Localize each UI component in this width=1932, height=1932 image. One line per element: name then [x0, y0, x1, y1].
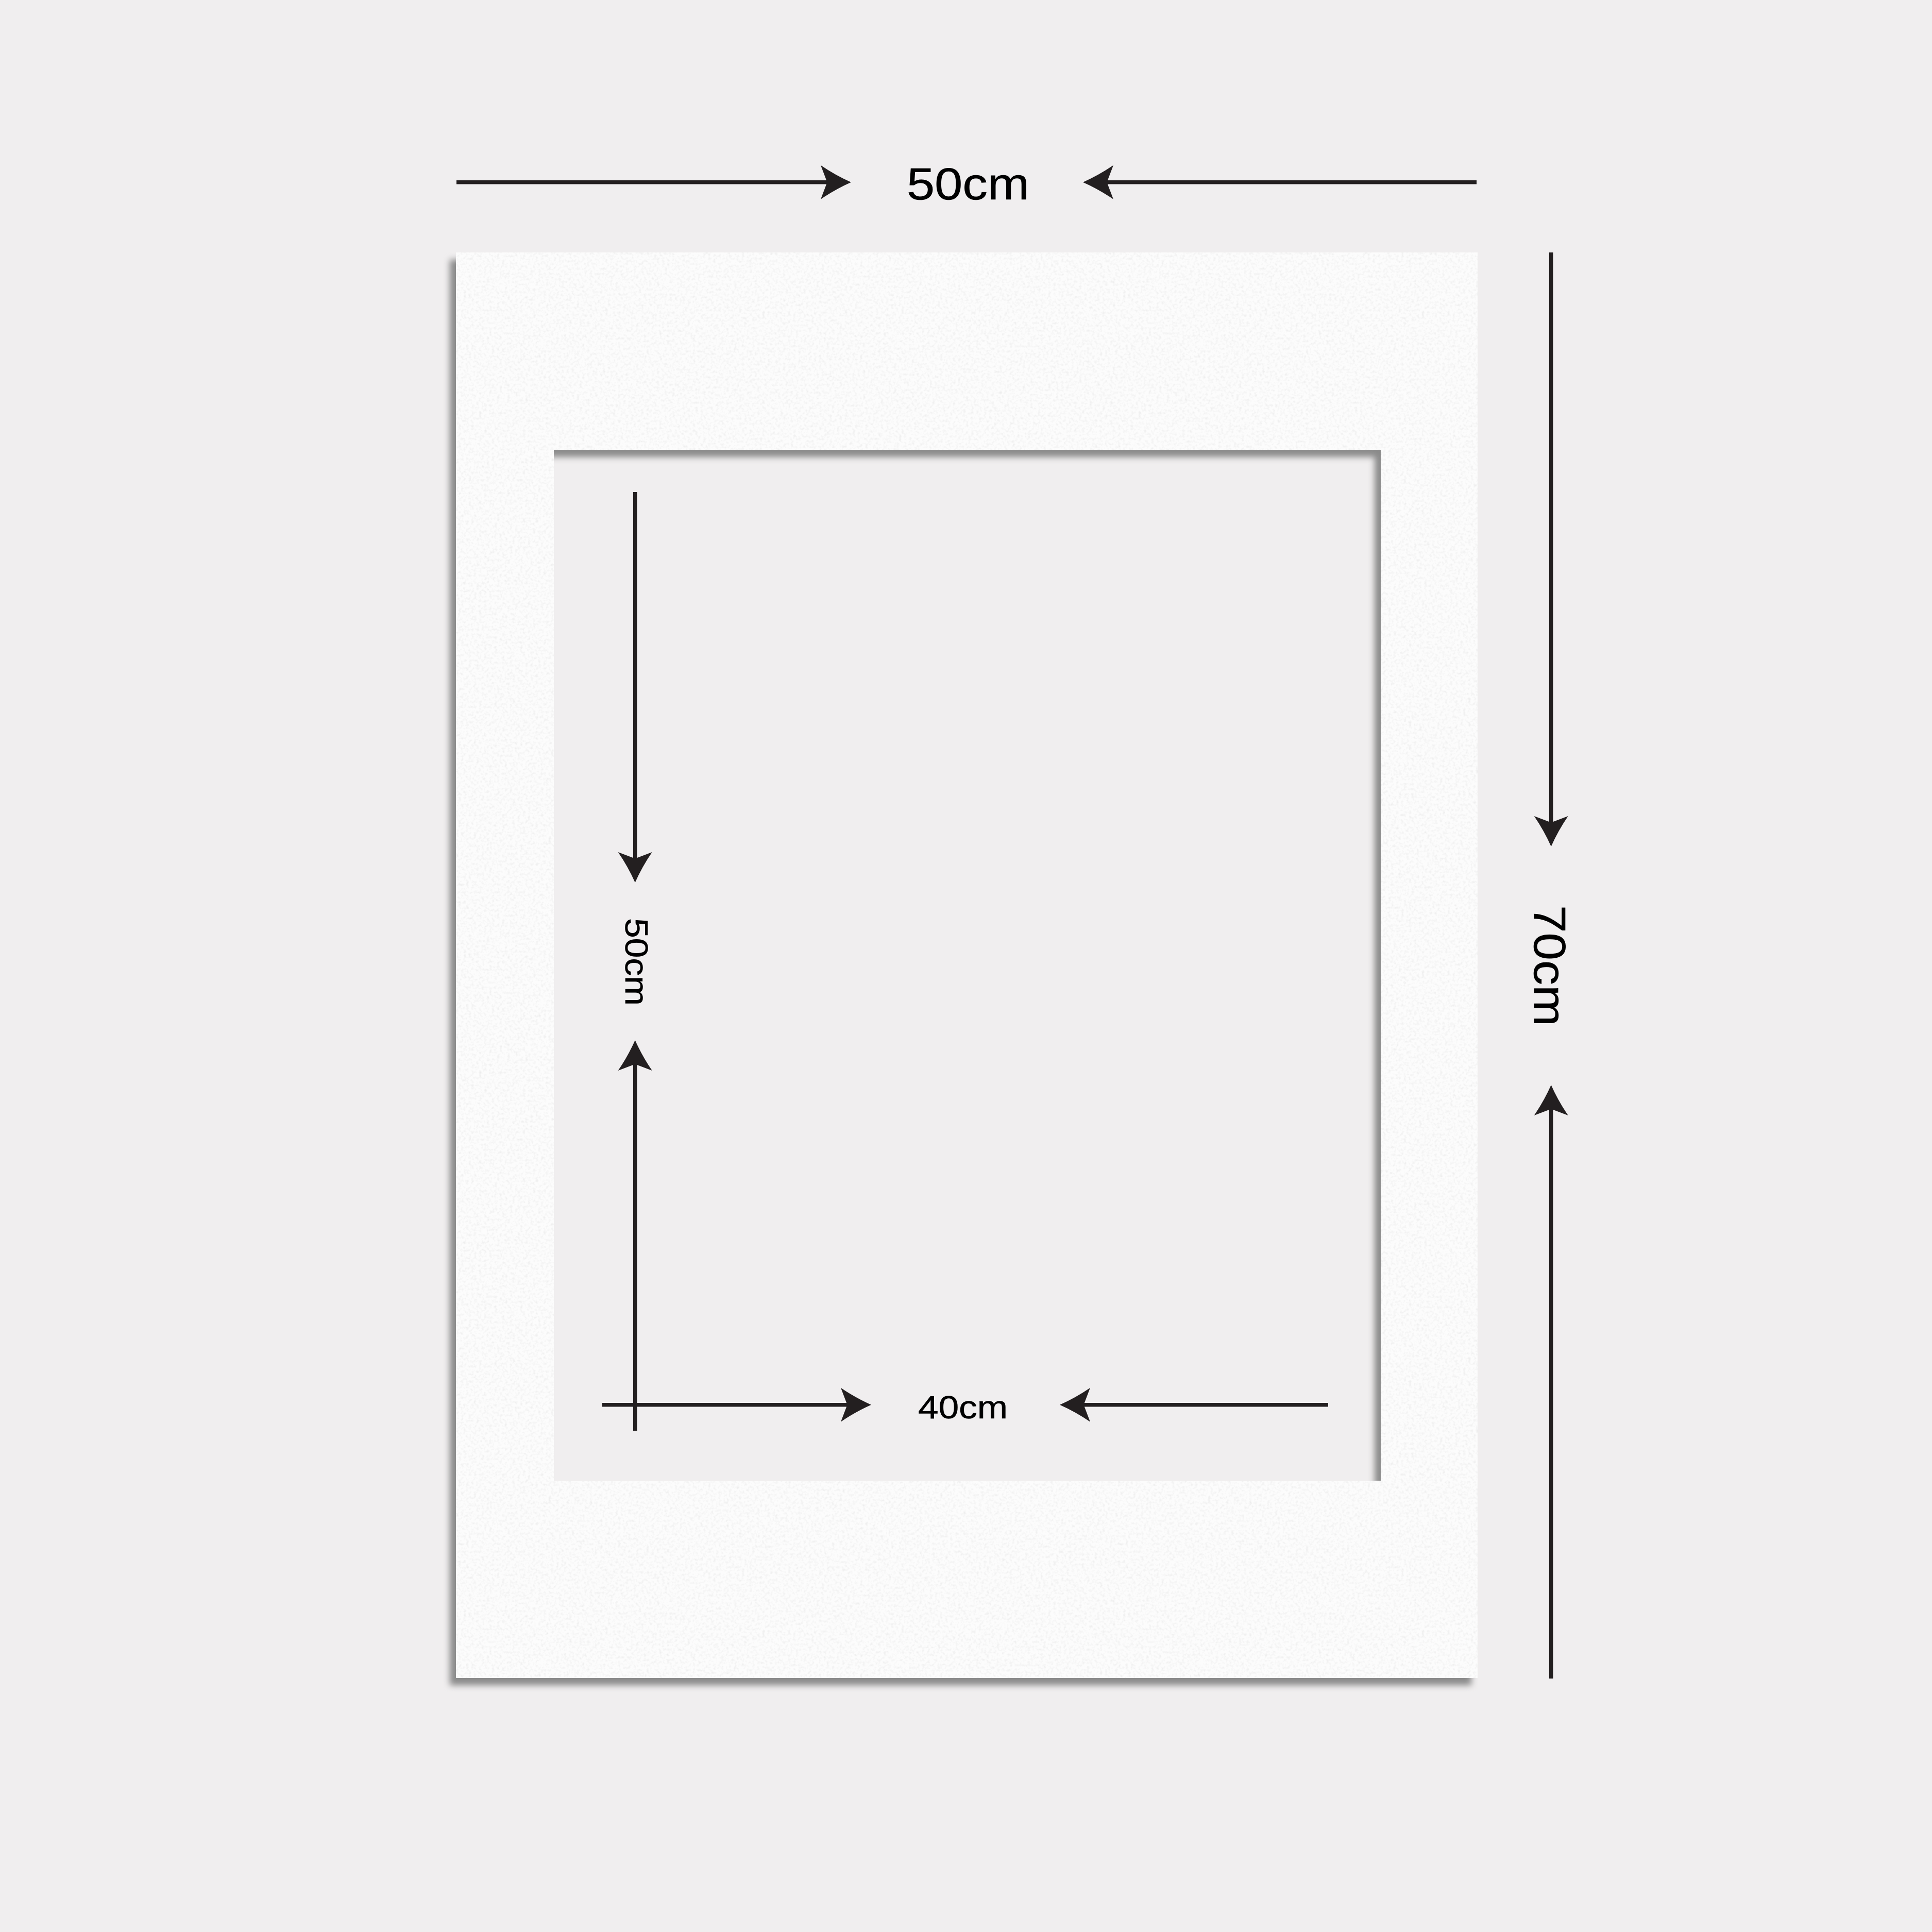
label: window height 50cm: 50cm	[618, 918, 654, 1006]
arrow: outer width, right	[1083, 165, 1477, 199]
mat board drop shadow	[450, 260, 1471, 1685]
label: window width 40cm: 40cm	[918, 1390, 1008, 1426]
label: outer height 70cm: 70cm	[1524, 905, 1574, 1026]
arrow: window width, left	[602, 1388, 871, 1422]
label: outer width 50cm: 50cm	[907, 159, 1029, 209]
arrow: outer height, bottom	[1534, 1085, 1568, 1679]
arrow: outer width, left	[456, 165, 851, 199]
arrow: window height, bottom	[618, 1040, 652, 1431]
mat board with window opening	[456, 252, 1478, 1678]
arrow: window width, right	[1060, 1388, 1328, 1422]
arrow: window height, top	[618, 492, 652, 883]
arrow: outer height, top	[1534, 252, 1568, 846]
